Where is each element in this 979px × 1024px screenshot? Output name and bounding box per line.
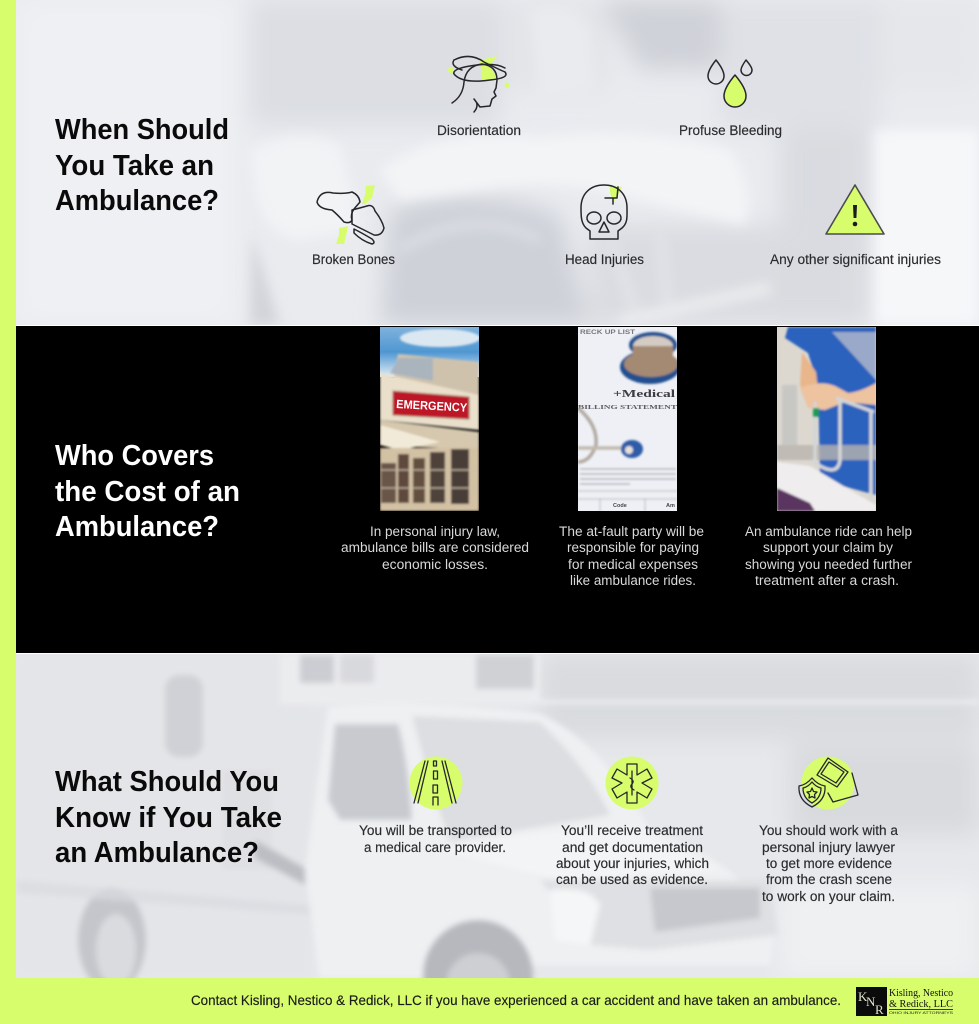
logo: K bbox=[858, 989, 868, 1004]
photo: medical billing statement with stethoscope: RECK UP LIST bbox=[580, 329, 635, 336]
text: treatment and documentation: and get documentation bbox=[562, 840, 703, 855]
logo: N bbox=[866, 994, 876, 1009]
logo: & Redick, LLC bbox=[889, 998, 953, 1010]
icon: star of life bbox=[606, 756, 658, 810]
panel: who covers the cost of an ambulance bbox=[16, 326, 979, 653]
heading: when should you take an ambulance: You Take an bbox=[55, 150, 214, 182]
text: economic losses: economic losses. bbox=[382, 557, 488, 572]
text: at-fault party: The at-fault party will be bbox=[559, 524, 704, 539]
text: transported: You will be transported to bbox=[359, 823, 512, 838]
text: at-fault party bbox=[559, 524, 704, 588]
heading: when should you take an ambulance: Ambulance? bbox=[55, 185, 219, 217]
panel: when should you take an ambulance bbox=[16, 0, 979, 325]
text: support your claim bbox=[745, 524, 912, 588]
logo: R bbox=[875, 1002, 884, 1017]
photo: medical billing statement with stethoscope bbox=[578, 327, 680, 511]
text: work with a lawyer bbox=[759, 823, 898, 904]
photo: medical billing statement with stethoscope: BILLING STATEMENT bbox=[578, 404, 678, 411]
text: support your claim: showing you needed further bbox=[745, 557, 912, 572]
label: broken bones: Broken Bones bbox=[312, 252, 395, 267]
text: transported: a medical care provider. bbox=[364, 840, 506, 855]
text: work with a lawyer: personal injury lawyer bbox=[762, 840, 896, 855]
heading: who covers the cost: the Cost of an bbox=[55, 476, 240, 508]
text: treatment and documentation: about your injuries, which bbox=[556, 856, 709, 871]
heading: who covers the cost bbox=[55, 440, 240, 543]
photo: nurse at stretcher rail bbox=[777, 327, 876, 511]
background photo: patient on stretcher bbox=[16, 0, 979, 325]
logo bbox=[856, 987, 954, 1017]
left lime stripe bbox=[0, 0, 16, 1024]
logo: Kisling, Nestico bbox=[889, 987, 953, 999]
footer background bbox=[0, 978, 979, 1024]
panel: what should you know bbox=[16, 654, 979, 978]
heading: what should you know: an Ambulance? bbox=[55, 837, 259, 869]
text: treatment and documentation: can be used as evidence. bbox=[556, 872, 708, 887]
label: head injuries: Head Injuries bbox=[565, 252, 644, 267]
heading: what should you know: Know if You Take bbox=[55, 802, 282, 834]
icon: profuse bleeding bbox=[708, 60, 752, 107]
text: support your claim: support your claim by bbox=[763, 540, 893, 555]
icon: broken bones bbox=[317, 185, 384, 244]
logo: OHIO INJURY ATTORNEYS bbox=[889, 1011, 954, 1015]
photo: medical billing statement with stethoscope: Code bbox=[613, 503, 627, 509]
black background bbox=[16, 326, 979, 653]
heading: what should you know bbox=[55, 766, 282, 869]
text: work with a lawyer: from the crash scene bbox=[766, 872, 892, 887]
heading: who covers the cost: Who Covers bbox=[55, 440, 214, 472]
text: economic losses: ambulance bills are considered bbox=[341, 540, 529, 555]
label: disorientation: Disorientation bbox=[437, 123, 521, 138]
text: at-fault party: for medical expenses bbox=[568, 557, 698, 572]
text: work with a lawyer: to work on your claim. bbox=[762, 889, 895, 904]
heading: what should you know: What Should You bbox=[55, 766, 279, 798]
text: treatment and documentation: You’ll receive treatment bbox=[561, 823, 703, 838]
icon: disorientation bbox=[448, 56, 510, 112]
heading: who covers the cost: Ambulance? bbox=[55, 511, 219, 543]
text: support your claim: treatment after a crash. bbox=[755, 573, 899, 588]
photo: hospital emergency entrance bbox=[380, 327, 480, 511]
text: work with a lawyer: to get more evidence bbox=[766, 856, 892, 871]
text: at-fault party: responsible for paying bbox=[567, 540, 699, 555]
photo: hospital emergency entrance: EMERGENCY bbox=[396, 397, 467, 415]
footer text: Contact Kisling, Nestico & Redick, LLC if you have experienced a car accident and have taken an ambulance. bbox=[191, 992, 841, 1008]
text: treatment and documentation bbox=[556, 823, 709, 887]
icon: road bbox=[410, 756, 462, 810]
photo: medical billing statement with stethoscope: +Medical bbox=[613, 388, 675, 400]
icon: warning triangle bbox=[826, 185, 884, 234]
icon: head injuries skull bbox=[581, 185, 627, 239]
panel: footer bbox=[0, 978, 979, 1024]
text: transported bbox=[359, 823, 512, 855]
heading: when should you take an ambulance: When Should bbox=[55, 114, 229, 146]
text: support your claim: An ambulance ride can help bbox=[745, 524, 912, 539]
heading: when should you take an ambulance bbox=[55, 114, 229, 217]
background photo: ambulance bbox=[16, 654, 979, 978]
label: profuse bleeding: Profuse Bleeding bbox=[679, 123, 782, 138]
photo: medical billing statement with stethoscope: Am bbox=[666, 503, 675, 509]
text: at-fault party: like ambulance rides. bbox=[570, 573, 696, 588]
text: economic losses: In personal injury law, bbox=[370, 524, 500, 539]
text: work with a lawyer: You should work with a bbox=[759, 823, 898, 838]
icon: police badge and photos bbox=[799, 756, 858, 810]
text: economic losses bbox=[341, 524, 529, 572]
label: any other significant injuries: Any other significant injuries bbox=[770, 252, 941, 267]
